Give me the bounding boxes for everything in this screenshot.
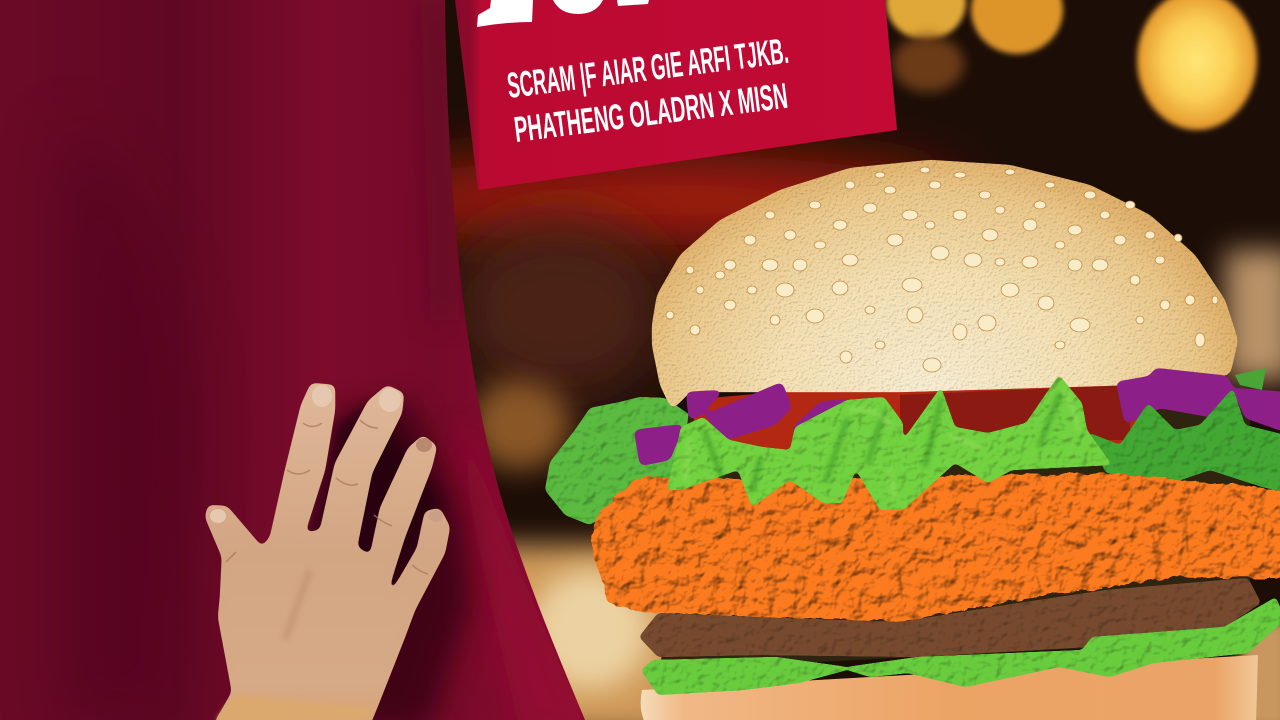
- wrist shadow and veins: [216, 570, 372, 720]
- right lettuce: [1087, 388, 1280, 492]
- red cabbage: [634, 368, 1280, 466]
- knuckle creases: [226, 420, 428, 574]
- lettuce highlights: [685, 390, 1078, 498]
- lower lettuce: [641, 597, 1280, 695]
- sign body text: [505, 30, 791, 150]
- bokeh lights: [886, 0, 1257, 130]
- fingernails: [210, 385, 443, 523]
- orange chicken fillet: [590, 473, 1280, 622]
- red promotional sign: [455, 0, 897, 190]
- hand on curtain: [205, 383, 470, 720]
- left back lettuce: [545, 397, 690, 525]
- sign body text: PHATHENG OLADRN X MISN: [512, 75, 790, 150]
- curtain folds: [60, 0, 590, 720]
- lettuce folds: [705, 395, 1059, 490]
- top sesame bun: [652, 160, 1238, 410]
- sesame seeds: [666, 167, 1218, 372]
- red curtain: [0, 0, 590, 720]
- dark filling behind layers: [660, 400, 1250, 670]
- sign headline fragments: [477, 0, 649, 27]
- beef patty: [639, 578, 1261, 657]
- bright top lettuce: [667, 375, 1112, 510]
- burger: [545, 160, 1280, 720]
- lower bun: [641, 655, 1258, 720]
- tomato slice: [690, 383, 1150, 450]
